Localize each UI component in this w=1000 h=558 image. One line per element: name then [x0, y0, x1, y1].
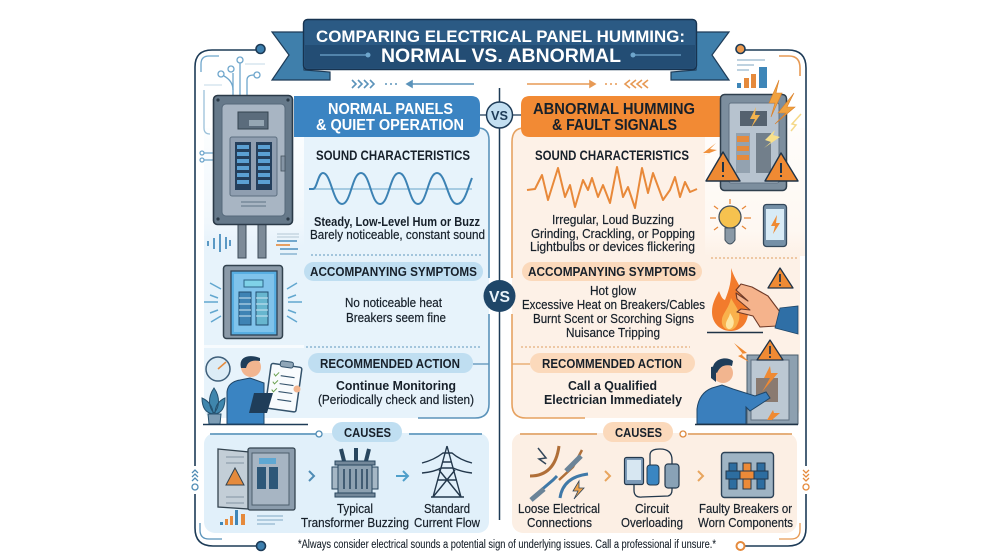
outer frame: [195, 44, 806, 550]
abnormal section: symptoms: [522, 262, 705, 340]
banner body: [304, 20, 696, 70]
chevron: [605, 471, 610, 481]
action regular: (Periodically check and listen): [318, 392, 474, 407]
pill heading: [530, 353, 695, 373]
VS badge bottom: [484, 280, 516, 312]
banner left accent: [320, 54, 366, 56]
normal section: symptoms: [304, 262, 483, 325]
spark: [734, 343, 749, 362]
arrows under banner: right: [527, 80, 648, 88]
divider: [311, 254, 481, 256]
abnormal header: [521, 96, 722, 137]
bolts: [769, 80, 782, 117]
icon: power tower: [422, 446, 472, 497]
abnormal section: symptoms: ACCOMPANYING SYMPTOMS: [528, 264, 696, 279]
pill heading: [308, 353, 473, 373]
caption: transformer buzzing: Transformer Buzzing: [301, 515, 409, 530]
caption: overloading: Overloading: [621, 515, 683, 530]
icon: lightbulb: [710, 199, 751, 244]
causes pill: [332, 422, 402, 442]
abnormal section: recommended action: RECOMMENDED ACTION: [542, 356, 682, 371]
connector: [512, 363, 530, 365]
normal section: sound characteristics: [309, 147, 485, 242]
arrows under banner: left: [352, 80, 474, 88]
icon: open panel: [218, 448, 295, 510]
icon: flickering phone: [764, 204, 786, 246]
panel: normal background: [204, 128, 489, 418]
circuit traces top-left: [200, 56, 265, 162]
causes connector: [520, 433, 792, 435]
clipboard: [265, 359, 303, 412]
icon: fire: [707, 268, 763, 332]
abnormal causes: [518, 422, 793, 530]
title banner: [272, 20, 729, 80]
symptom line 2: Breakers seem fine: [346, 310, 446, 325]
symptom 4: Nuisance Tripping: [566, 325, 660, 340]
plant: [202, 388, 225, 414]
symptom line 1: No noticeable heat: [345, 295, 442, 310]
description 1: Irregular, Loud Buzzing: [552, 212, 674, 227]
warning right: [765, 153, 798, 181]
action line 2: Electrician Immediately: [544, 392, 683, 407]
banner right accent: [634, 54, 681, 56]
person: [697, 385, 770, 424]
action bold: Continue Monitoring: [336, 378, 456, 393]
warning left: [706, 152, 740, 181]
banner right tail: [671, 32, 729, 80]
icon: electrician calling: [695, 340, 798, 426]
arrow: [396, 471, 408, 481]
icon: loose wires: [530, 446, 588, 500]
pale top-right area behind panel: [705, 128, 805, 256]
header line 2: & QUIET OPERATION: [316, 117, 464, 134]
panel: abnormal background: [512, 128, 800, 418]
frame chevrons left: [190, 466, 200, 494]
description 2: Grinding, Crackling, or Popping: [531, 226, 695, 241]
caption: circuit: Circuit: [635, 501, 669, 516]
fault panel: [747, 355, 798, 424]
erratic waveform: [527, 167, 697, 208]
action line 1: Call a Qualified: [568, 378, 657, 393]
icon: small data list: [276, 234, 299, 254]
pill heading: [522, 262, 702, 281]
heading: SOUND CHARACTERISTICS: [535, 147, 689, 163]
icon: technician with clipboard: [202, 356, 308, 424]
body: [227, 378, 264, 424]
abnormal section: sound characteristics: [527, 147, 697, 254]
normal causes: [210, 422, 482, 530]
corner accent left: [200, 523, 222, 539]
pill heading: [304, 262, 483, 281]
icon: faulty breakers: [722, 452, 774, 498]
pale band between left sections: [204, 345, 304, 348]
symptom 2: Excessive Heat on Breakers/Cables: [522, 297, 705, 312]
footnote: *Always consider electrical sounds a potential sign of underlying issues. Call a professional if unsure.*: [298, 539, 716, 551]
header line 2: & FAULT SIGNALS: [552, 117, 677, 134]
symptom 3: Burnt Scent or Scorching Signs: [533, 311, 694, 326]
corner accent right: [779, 523, 800, 539]
smooth waveform: [309, 173, 472, 204]
icon: sound bars: [208, 234, 230, 252]
divider: [711, 257, 798, 259]
caption: worn components: Worn Components: [698, 515, 793, 530]
mini chart top-right: [737, 56, 800, 88]
frame chevrons right: [801, 466, 811, 494]
normal causes: CAUSES: [344, 425, 391, 440]
banner line 1: COMPARING ELECTRICAL PANEL HUMMING:: [316, 28, 685, 46]
caption: current flow: Current Flow: [414, 515, 481, 530]
abnormal section: recommended action: [512, 353, 695, 407]
normal panel border: [418, 128, 489, 418]
icon: main electrical panel: [214, 96, 292, 258]
abnormal causes: CAUSES: [615, 425, 662, 440]
causes pill: [603, 422, 673, 442]
icon: transformer: [332, 448, 378, 497]
caption: typical: Typical: [337, 501, 373, 516]
banner line 2: NORMAL VS. ABNORMAL: [381, 45, 621, 67]
caption: faulty breakers: Faulty Breakers or: [699, 501, 793, 516]
VS badge top: VS: [491, 108, 508, 123]
description bold: Steady, Low-Level Hum or Buzz: [314, 214, 480, 229]
caption: connections: Connections: [527, 515, 592, 530]
causes connector: [210, 433, 482, 435]
chevron: [309, 471, 314, 481]
caption: loose electrical: Loose Electrical: [518, 501, 600, 516]
chevron: [698, 471, 703, 481]
divider: [306, 346, 481, 348]
abnormal panel border: [512, 128, 585, 418]
header line 1: ABNORMAL HUMMING: [533, 101, 695, 118]
icon: hand: [736, 284, 798, 334]
panel: abnormal causes background: [512, 433, 797, 533]
icon: glowing panel: [204, 266, 302, 338]
tablet: [249, 393, 273, 413]
icon: faulty panel: [702, 80, 801, 190]
VS badge bottom: VS: [489, 289, 510, 306]
description regular: Barely noticeable, constant sound: [310, 227, 485, 242]
gauge: [206, 357, 230, 381]
normal header: [294, 96, 480, 137]
icon: warning triangle: [768, 268, 793, 288]
warning sign: [757, 340, 783, 360]
heading: SOUND CHARACTERISTICS: [316, 147, 470, 163]
caption: standard: Standard: [424, 501, 470, 516]
banner left tail: [272, 32, 330, 80]
VS badge top: [480, 102, 521, 128]
panel: normal causes background: [204, 433, 489, 533]
normal section: recommended action: [308, 353, 489, 407]
normal section: recommended action: RECOMMENDED ACTION: [320, 356, 460, 371]
description 3: Lightbulbs or devices flickering: [530, 239, 695, 254]
pale top-left area behind panel: [204, 128, 304, 246]
header line 1: NORMAL PANELS: [328, 101, 453, 118]
icon: small bars: [220, 510, 283, 525]
symptom 1: Hot glow: [590, 283, 637, 298]
icon: overloaded devices: [624, 449, 679, 497]
normal section: symptoms: ACCOMPANYING SYMPTOMS: [310, 264, 477, 279]
divider: [521, 346, 690, 348]
